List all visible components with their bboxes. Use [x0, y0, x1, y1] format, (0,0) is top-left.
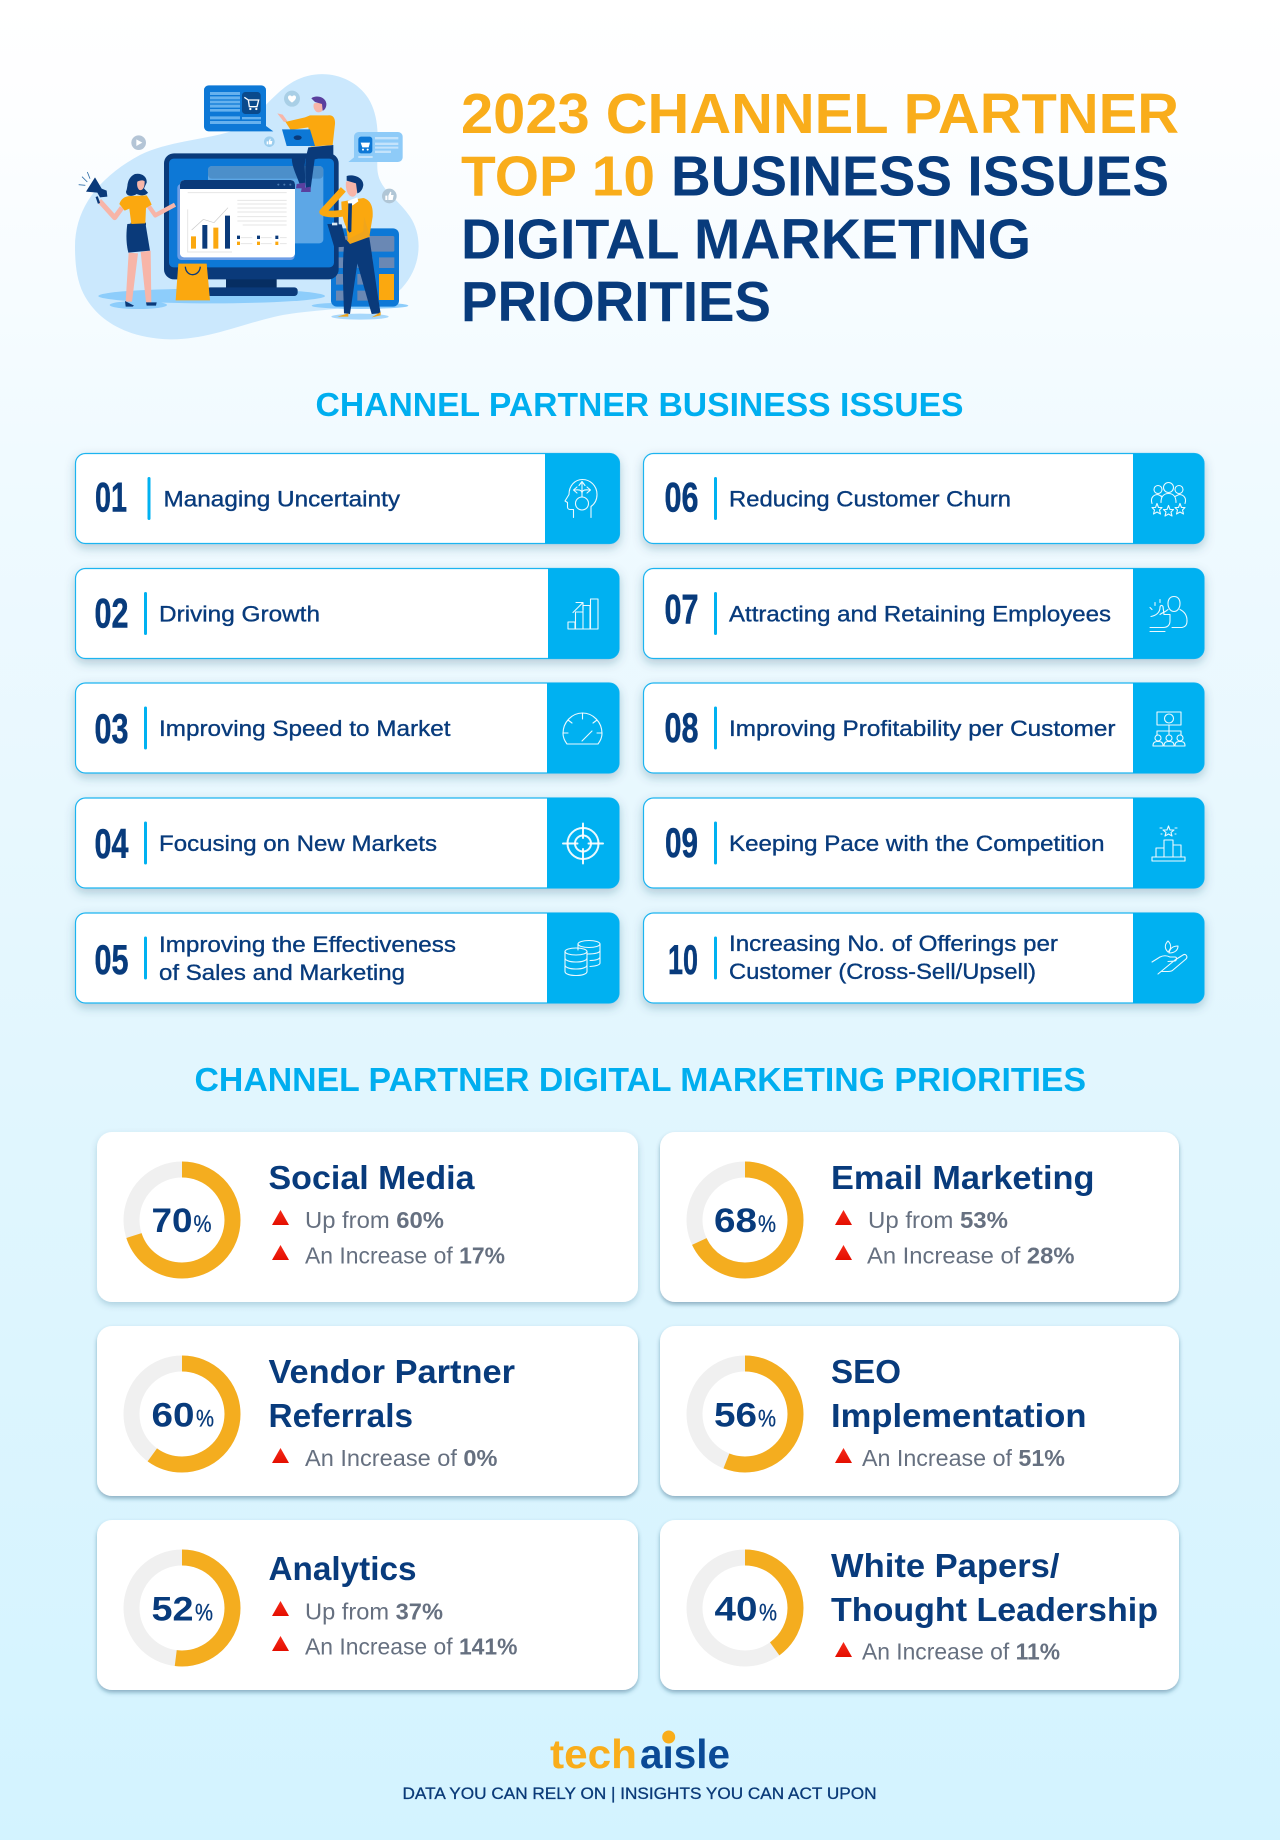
issue 06: [644, 454, 1204, 544]
priority: vendor partner referrals 60%: An Increase of 0%: [305, 1445, 498, 1471]
issue 08: Improving Profitability per Customer: [729, 716, 1116, 741]
donut 40%: %: [759, 1600, 777, 1626]
priority: seo implementation 56%: [660, 1326, 1179, 1496]
priority: social media 70%: Up from 60%: [305, 1207, 444, 1233]
issue 05: of Sales and Marketing: [159, 960, 405, 985]
logo: techaisle: tech: [550, 1731, 637, 1777]
issue 08: 08: [664, 704, 698, 751]
issue 02: [76, 568, 619, 658]
issue 10: Increasing No. of Offerings per: [729, 931, 1059, 956]
issue 07: Attracting and Retaining Employees: [729, 602, 1111, 626]
donut 70%: %: [194, 1211, 212, 1238]
illustration: digital marketing team around a monitor: [75, 74, 419, 339]
issue 09: [644, 798, 1204, 888]
priority: analytics 52%: An Increase of 141%: [305, 1634, 518, 1660]
priority: social media 70%: [97, 1132, 638, 1302]
title: 2023 CHANNEL PARTNER: [461, 82, 1179, 146]
issue 06: 06: [664, 474, 698, 520]
priority: seo implementation 56%: An Increase of 51%: [862, 1445, 1065, 1471]
issue 09: Keeping Pace with the Competition: [729, 831, 1104, 856]
priority: seo implementation 56%: SEO: [831, 1353, 901, 1390]
donut 52%: %: [195, 1600, 213, 1626]
donut 60%: 60: [152, 1396, 194, 1434]
donut 70%: [132, 1170, 232, 1270]
priority: white papers 40%: [660, 1520, 1179, 1690]
icon: person and thumbs up: [1150, 596, 1187, 632]
priority: analytics 52%: [97, 1520, 638, 1690]
donut 56%: 56: [714, 1396, 757, 1434]
issue 05: Improving the Effectiveness: [159, 932, 456, 957]
issue 05: 05: [94, 936, 128, 983]
issue 01: Managing Uncertainty: [164, 486, 401, 512]
issue 08: [644, 683, 1204, 773]
issue 10: 10: [668, 936, 698, 983]
issue 10: [644, 913, 1204, 1003]
icon: rising bars: [568, 599, 598, 629]
donut 68%: [694, 1170, 796, 1270]
donut 52%: [132, 1558, 232, 1658]
priority: white papers 40%: Thought Leadership: [831, 1591, 1158, 1628]
icon: target: [563, 824, 603, 864]
priority: email marketing 68%: An Increase of 28%: [867, 1242, 1074, 1268]
issue 04: Focusing on New Markets: [159, 831, 437, 856]
issue 09: 09: [665, 819, 698, 866]
priority: vendor partner referrals 60%: Referrals: [268, 1397, 413, 1434]
icon: team with stars: [1151, 482, 1186, 516]
donut 68%: %: [758, 1211, 776, 1238]
donut 60%: [132, 1364, 232, 1464]
priority: vendor partner referrals 60%: [97, 1326, 638, 1496]
issue 05: [76, 913, 619, 1003]
priority: white papers 40%: An Increase of 11%: [862, 1638, 1060, 1664]
heading: business issues: CHANNEL PARTNER BUSINESS ISSUES: [316, 386, 963, 423]
title: TOP 10: [461, 144, 655, 208]
issue 04: [76, 798, 619, 888]
priority: vendor partner referrals 60%: Vendor Partner: [268, 1353, 515, 1390]
priority: analytics 52%: Analytics: [268, 1550, 416, 1587]
priority: social media 70%: Social Media: [268, 1159, 475, 1196]
issue 01: 01: [95, 474, 127, 520]
logo: techaisle: [550, 1730, 730, 1777]
donut 60%: %: [196, 1406, 214, 1432]
priority: social media 70%: An Increase of 17%: [305, 1242, 505, 1268]
issue 07: [644, 568, 1204, 658]
issue 03: 03: [94, 705, 128, 752]
issue 07: 07: [664, 586, 698, 632]
donut 40%: [694, 1558, 796, 1658]
title: DIGITAL MARKETING: [461, 208, 1031, 272]
tagline: DATA YOU CAN RELY ON | INSIGHTS YOU CAN ACT UPON: [402, 1784, 876, 1803]
issue 03: Improving Speed to Market: [159, 716, 451, 741]
title: PRIORITIES: [461, 270, 771, 334]
logo: techaisle: aısle: [640, 1731, 730, 1777]
issue 02: 02: [94, 590, 128, 636]
icon: hand with sprout: [1152, 941, 1187, 974]
priority: email marketing 68%: Up from 53%: [868, 1207, 1008, 1233]
title: [461, 82, 1179, 334]
priority: white papers 40%: White Papers/: [831, 1547, 1060, 1584]
priority: analytics 52%: Up from 37%: [305, 1598, 443, 1624]
icon: speedometer: [563, 713, 602, 744]
priority: email marketing 68%: Email Marketing: [831, 1159, 1094, 1196]
issue 06: Reducing Customer Churn: [729, 486, 1011, 512]
issue 04: 04: [94, 820, 129, 867]
icon: podium with star: [1152, 826, 1185, 861]
issue 10: Customer (Cross-Sell/Upsell): [729, 959, 1036, 984]
donut 52%: 52: [152, 1590, 194, 1628]
issue 02: Driving Growth: [159, 602, 320, 626]
donut 68%: 68: [714, 1202, 757, 1240]
heading: digital marketing priorities: CHANNEL PARTNER DIGITAL MARKETING PRIORITIES: [194, 1061, 1086, 1098]
title: BUSINESS ISSUES: [671, 144, 1169, 208]
donut 56%: [694, 1364, 796, 1464]
priority: email marketing 68%: [660, 1132, 1179, 1302]
icon: head with arrows: [565, 480, 597, 518]
donut 40%: 40: [714, 1590, 758, 1628]
donut 70%: 70: [152, 1202, 192, 1240]
icon: database stacks: [565, 940, 600, 976]
donut 56%: %: [758, 1406, 776, 1432]
priority: seo implementation 56%: Implementation: [831, 1397, 1086, 1434]
issue 01: [76, 454, 620, 544]
icon: money over network: [1153, 712, 1185, 746]
issue 03: [76, 683, 619, 773]
